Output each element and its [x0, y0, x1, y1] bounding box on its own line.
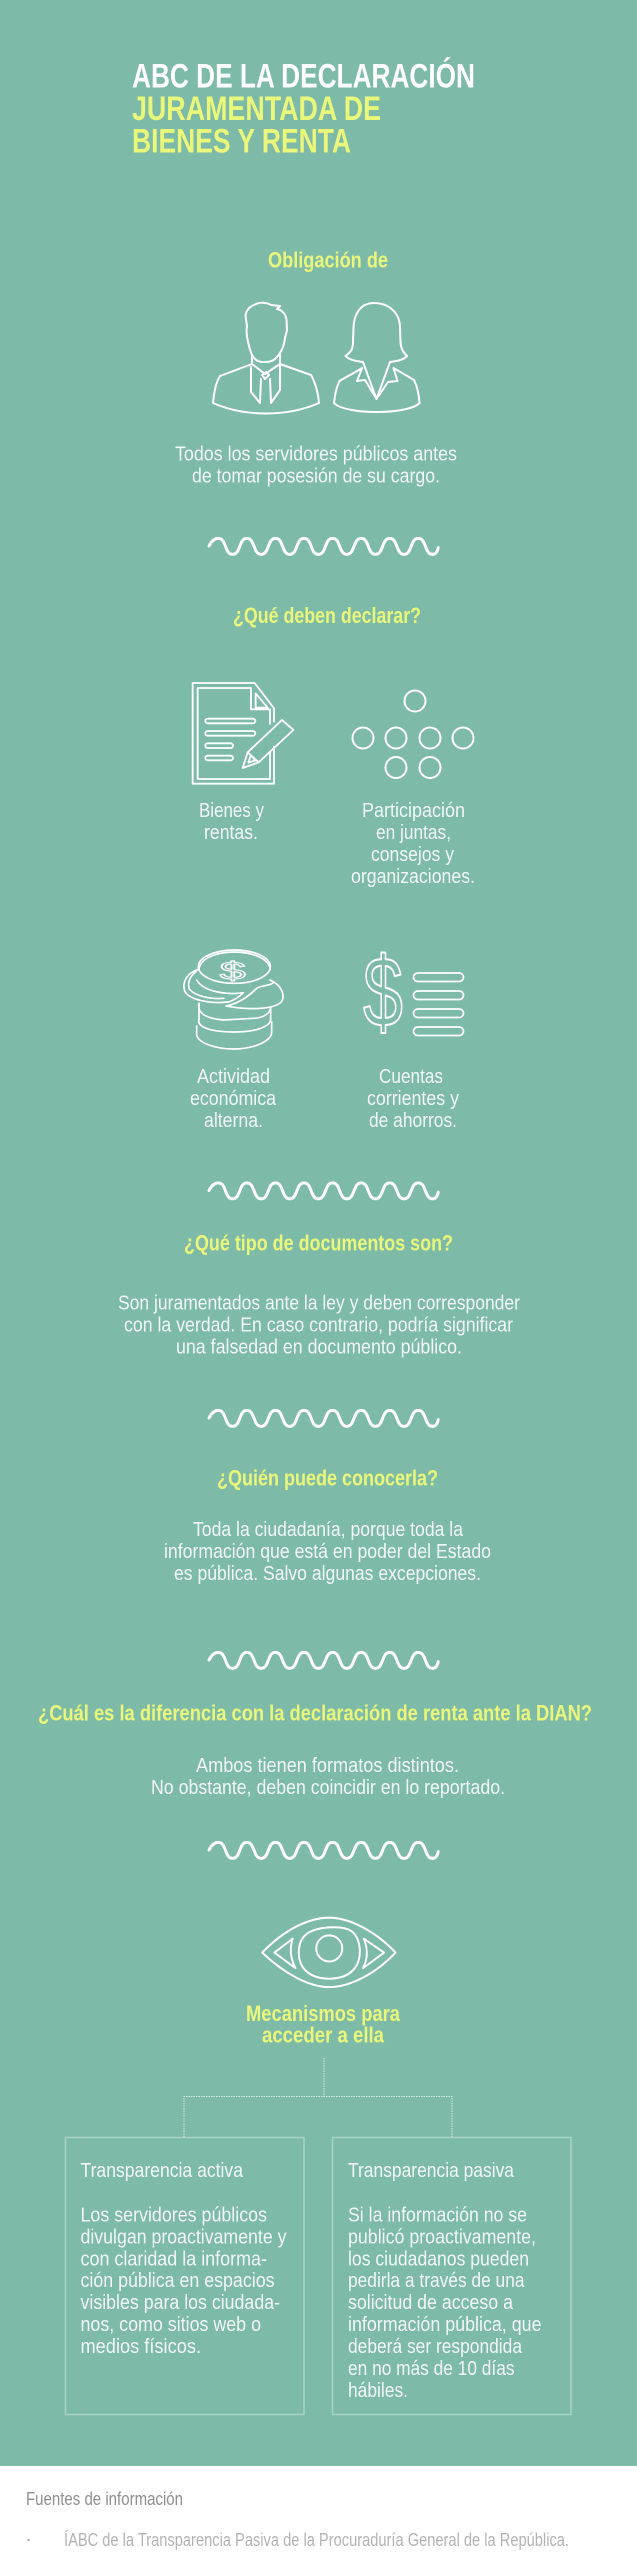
panel text: transparencia pasiva: los ciudadanos pueden: [348, 2248, 529, 2270]
label: participación: consejos y: [371, 844, 454, 866]
sources heading: Fuentes de información: [26, 2489, 183, 2509]
label: cuentas: corrientes y: [367, 1088, 459, 1110]
icon: coin stack: $: [220, 957, 246, 985]
label: actividad económica: Actividad: [197, 1066, 270, 1088]
divider wave 3: [209, 1410, 438, 1426]
title: [132, 57, 475, 161]
text: todos los servidores: Todos los servidores públicos antes: [175, 444, 457, 466]
divider wave 2: [209, 1183, 438, 1199]
label: participación: [351, 800, 475, 888]
heading: qué deben declarar: ¿Qué deben declarar?: [233, 603, 421, 628]
icon: document and pencil: [193, 683, 293, 784]
text: toda la ciudadanía: información que está en poder del Estado: [164, 1541, 491, 1563]
panel text: transparencia pasiva: hábiles.: [348, 2380, 408, 2402]
panel text: transparencia activa: [80, 2204, 286, 2358]
connector lines: [184, 2058, 452, 2137]
panel text: transparencia activa: nos, como sitios web o: [80, 2314, 261, 2336]
heading: qué tipo de documentos: ¿Qué tipo de documentos son?: [184, 1230, 453, 1256]
panel text: transparencia activa: divulgan proactivamente y: [80, 2226, 286, 2248]
label: cuentas: de ahorros.: [369, 1110, 457, 1132]
text: son juramentados: Son juramentados ante la ley y deben corresponder: [118, 1292, 520, 1314]
label: participación: organizaciones.: [351, 866, 475, 888]
label: cuentas: [367, 1066, 459, 1132]
text: toda la ciudadanía: Toda la ciudadanía, porque toda la: [193, 1519, 464, 1541]
divider wave 1: [209, 538, 438, 554]
icon: coin stack: [184, 950, 283, 1049]
panel text: transparencia activa: Los servidores públicos: [80, 2204, 267, 2226]
heading: quién puede conocerla: ¿Quién puede conocerla?: [217, 1466, 438, 1490]
panel text: transparencia activa: ción pública en espacios: [80, 2270, 274, 2292]
icon: woman in blazer: [334, 303, 420, 412]
panel text: transparencia pasiva: Si la información no se: [348, 2204, 527, 2226]
panel text: transparencia pasiva: en no más de 10 días: [348, 2358, 514, 2380]
item: actividad económica: [184, 950, 283, 1132]
panel heading: transparencia pasiva: Transparencia pasiva: [348, 2160, 515, 2182]
icon: circles: [352, 690, 474, 778]
sources bullet: [27, 2539, 30, 2541]
item: cuentas: [363, 938, 464, 1132]
icon: dollar and list: [363, 938, 464, 1048]
text: toda la ciudadanía: es pública. Salvo algunas excepciones.: [174, 1563, 481, 1585]
panel: transparencia activa: [66, 2138, 304, 2414]
heading: mecanismos para acceder: acceder a ella: [262, 2022, 385, 2048]
section: qué tipo de documentos: [118, 1230, 520, 1358]
label: cuentas: Cuentas: [379, 1066, 443, 1088]
icon: dollar and list: $: [363, 938, 403, 1048]
text: ambos tienen formatos: Ambos tienen formatos distintos.: [196, 1755, 459, 1777]
panel: transparencia pasiva: [332, 2138, 571, 2414]
heading: mecanismos para acceder: Mecanismos para: [246, 2001, 401, 2026]
heading: mecanismos para acceder: [246, 2001, 401, 2048]
label: actividad económica: alterna.: [204, 1110, 263, 1132]
panel text: transparencia activa: con claridad la informa-: [80, 2248, 267, 2270]
panel text: transparencia pasiva: deberá ser respondida: [348, 2336, 523, 2358]
text: ambos tienen formatos: [151, 1755, 505, 1799]
label: bienes y rentas: [199, 800, 264, 844]
title: ABC DE LA DECLARACIÓN: [132, 57, 475, 95]
panel text: transparencia pasiva: solicitud de acceso a: [348, 2292, 514, 2314]
title: BIENES Y RENTA: [132, 123, 351, 161]
text: toda la ciudadanía: [164, 1519, 491, 1585]
title: JURAMENTADA DE: [132, 90, 381, 128]
text: son juramentados: [118, 1292, 520, 1358]
item: participación: [351, 690, 475, 888]
panel heading: transparencia activa: Transparencia activa: [80, 2160, 244, 2182]
label: actividad económica: económica: [190, 1088, 277, 1110]
panel text: transparencia activa: medios físicos.: [80, 2336, 201, 2358]
section: obligación de: [175, 248, 457, 488]
icon: eye: [262, 1918, 396, 1987]
panel text: transparencia pasiva: pedirla a través de una: [348, 2270, 525, 2292]
panel text: transparencia pasiva: publicó proactivamente,: [348, 2226, 536, 2248]
label: participación: Participación: [362, 800, 465, 822]
divider wave 5: [209, 1842, 438, 1858]
section: diferencia con la DIAN: [38, 1701, 592, 1799]
icon: man in suit: [213, 303, 319, 414]
text: todos los servidores: [175, 444, 457, 488]
panel text: transparencia pasiva: [348, 2204, 542, 2402]
section: quién puede conocerla: [164, 1466, 491, 1585]
text: todos los servidores: de tomar posesión de su cargo.: [192, 466, 440, 488]
text: ambos tienen formatos: No obstante, deben coincidir en lo reportado.: [151, 1777, 505, 1799]
divider wave 4: [209, 1652, 438, 1668]
label: actividad económica: [190, 1066, 277, 1132]
text: son juramentados: una falsedad en documento público.: [176, 1336, 462, 1358]
panel text: transparencia activa: visibles para los ciudada-: [80, 2292, 280, 2314]
panel text: transparencia pasiva: información pública, que: [348, 2314, 542, 2336]
item: bienes y rentas: [193, 683, 293, 844]
label: participación: en juntas,: [376, 822, 451, 844]
label: bienes y rentas: rentas.: [204, 822, 258, 844]
label: bienes y rentas: Bienes y: [199, 800, 264, 822]
footer: sources: [26, 2489, 569, 2550]
heading: obligación de: Obligación de: [268, 248, 388, 273]
text: son juramentados: con la verdad. En caso contrario, podría significar: [124, 1314, 513, 1336]
